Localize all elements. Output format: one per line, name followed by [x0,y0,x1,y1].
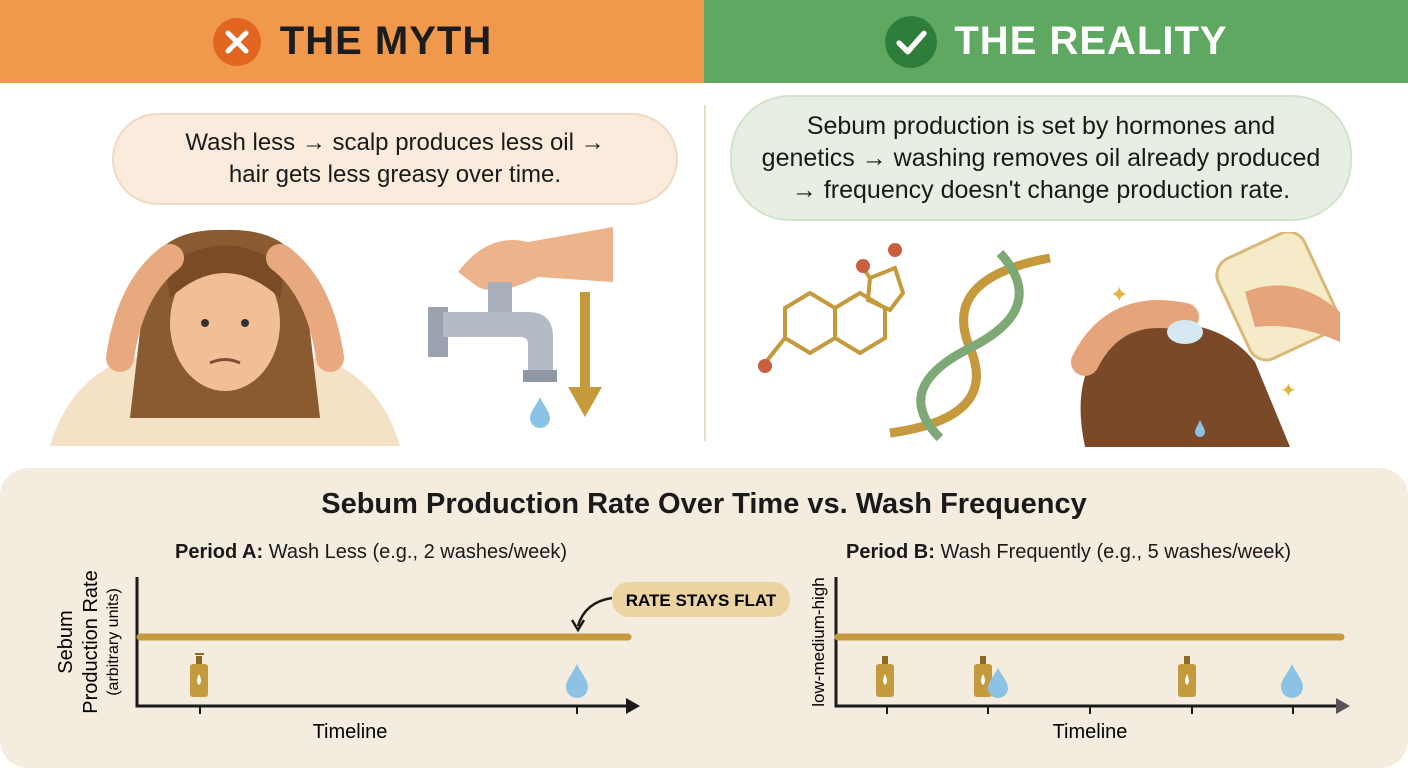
reality statement: Sebum production is set by hormones and [807,112,1275,140]
header: reality [704,0,1408,83]
header: reality: THE REALITY [954,19,1228,63]
bottom chart panel [0,468,1408,768]
chart A: (arbitrary units) [105,588,122,696]
chart A [55,570,790,743]
myth statement: Wash less → scalp produces less oil → [185,129,605,156]
myth statement: hair gets less greasy over time. [229,161,561,188]
icon: check circle [885,16,937,68]
illustration: faucet with down arrow [428,227,613,428]
illustration: washing hair with shampoo: ✦ [1110,282,1128,307]
chart B: Timeline [1053,721,1127,743]
chart B [809,577,1350,743]
header: myth [0,0,704,83]
chart title: Sebum Production Rate Over Time vs. Wash Frequency [321,488,1087,520]
chart A: Timeline [313,721,387,743]
myth statement [112,113,678,205]
period B label: Period B: Wash Frequently (e.g., 5 washes/week) [846,541,1291,563]
chart A: Sebum [55,610,77,674]
header: myth: THE MYTH [280,19,492,63]
chart B: low-medium-high [809,577,828,707]
period A label: Period A: Wash Less (e.g., 2 washes/week) [175,541,567,563]
illustration: washing hair with shampoo: ✦ [1280,380,1297,402]
illustration: washing hair with shampoo [1071,232,1340,447]
illustration: DNA helix [889,250,1051,442]
illustration: hormone molecule [758,243,905,373]
reality statement: → frequency doesn't change production rate. [792,176,1290,204]
reality statement: genetics → washing removes oil already produced [762,144,1320,172]
chart A: Production Rate [80,570,102,714]
icon: x circle [213,18,261,66]
reality statement [730,95,1352,221]
illustration: woman with greasy hair [50,230,400,446]
chart A: RATE STAYS FLAT [626,591,777,610]
